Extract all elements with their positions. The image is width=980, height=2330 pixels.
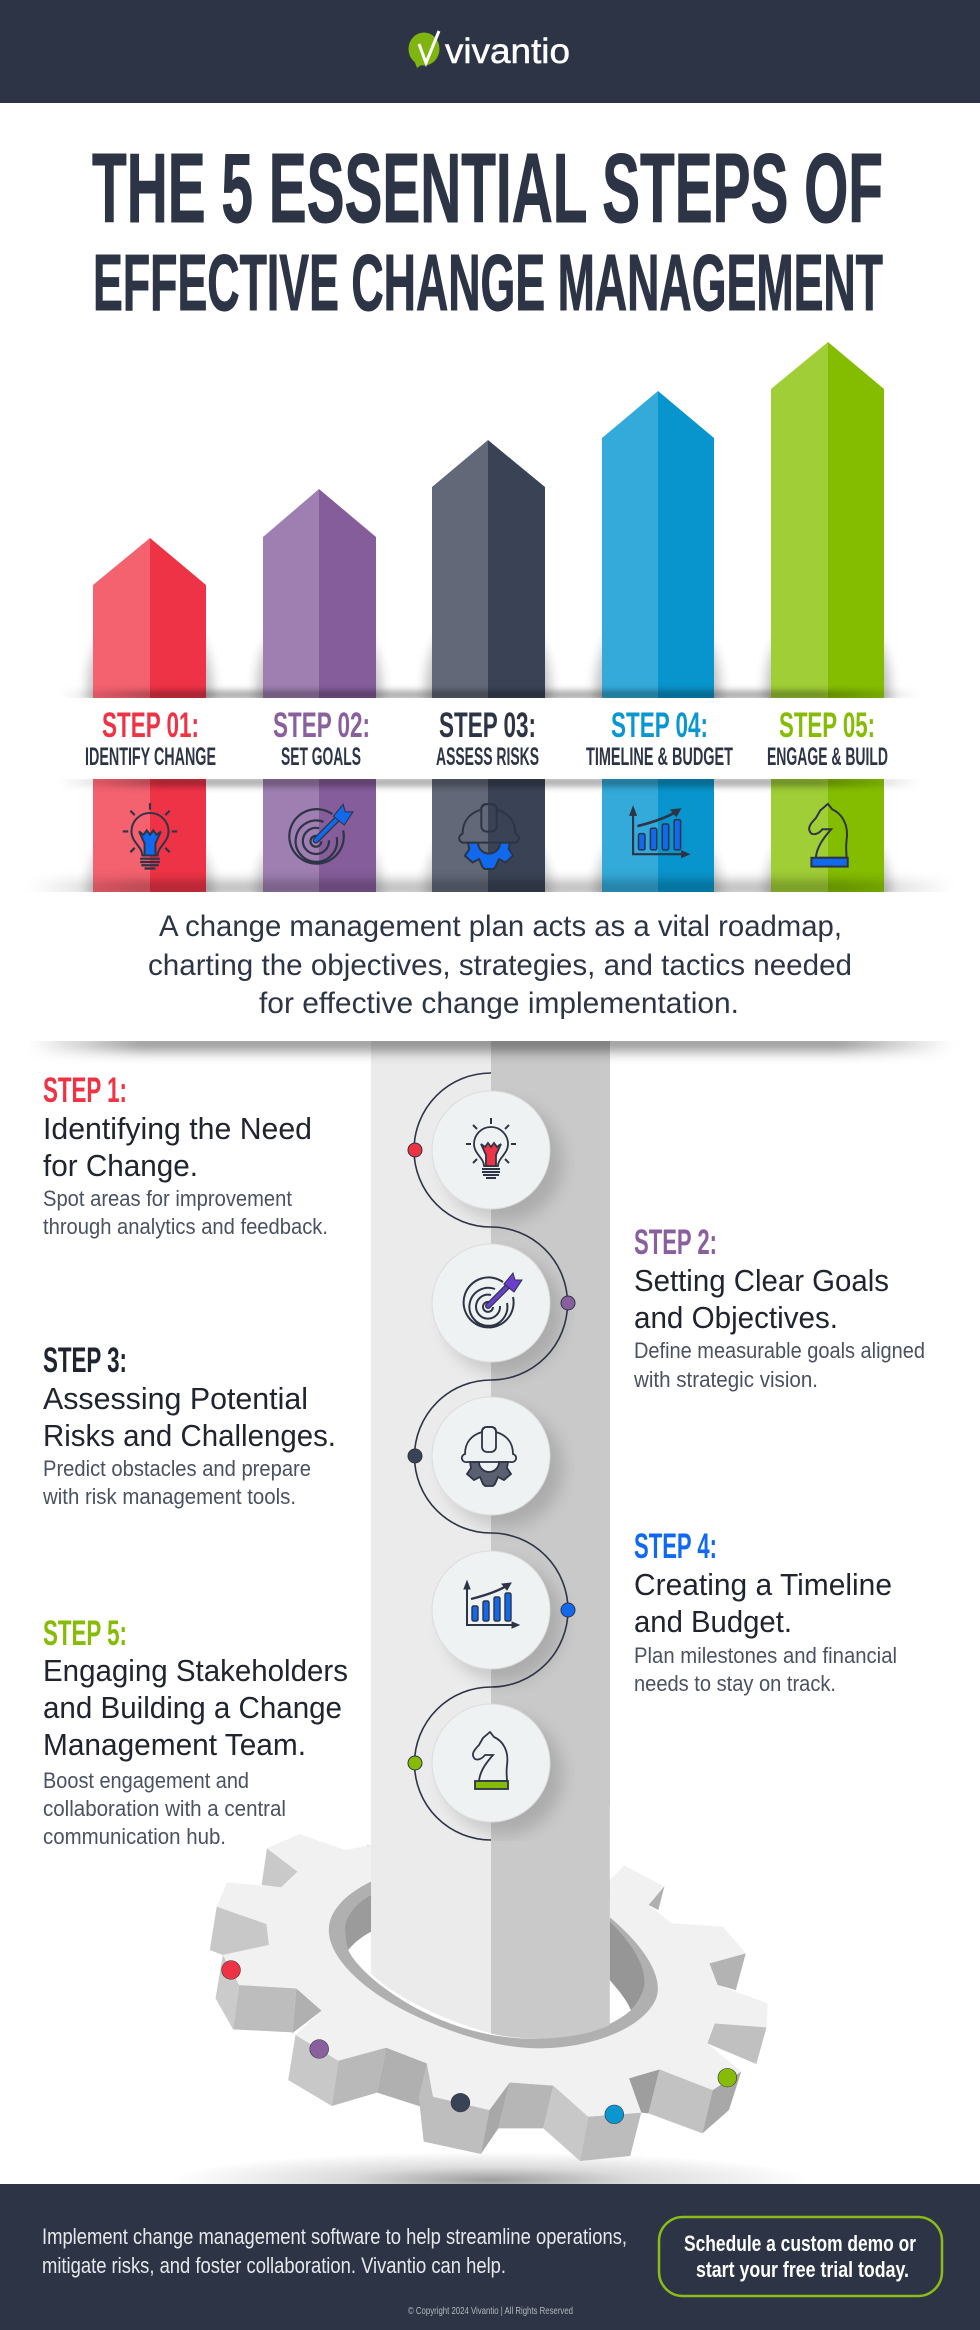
central pillar (371, 1041, 610, 1806)
call-to-action button (659, 2217, 942, 2296)
text: step 5: Engaging Stakeholders (43, 1653, 348, 1688)
title (92, 133, 883, 327)
text: step 4: STEP 4: (634, 1527, 717, 1566)
footer message (42, 2224, 627, 2278)
text: step 2: Setting Clear Goals (634, 1263, 889, 1298)
icon: helmet and gear (462, 1427, 516, 1486)
text: step 4: and Budget. (634, 1604, 792, 1639)
arrow column: step 3 (432, 440, 545, 698)
footer bar (0, 2184, 980, 2330)
footer message: mitigate risks, and foster collaboration. Vivantio can help. (42, 2253, 506, 2278)
label: step 01: STEP 01: (102, 706, 199, 745)
gear dots (222, 1961, 737, 2124)
lower column shadows (88, 820, 890, 960)
step labels row (85, 706, 888, 771)
text: step 3: Predict obstacles and prepare (43, 1456, 311, 1481)
text: step 3: with risk management tools. (42, 1484, 296, 1509)
timeline curve (414, 1073, 568, 1840)
text: step 5: Boost engagement and (43, 1768, 249, 1793)
icon: light bulb, column 1 (123, 803, 177, 869)
label: step 02 (273, 706, 370, 771)
label: step 04: TIMELINE & BUDGET (586, 743, 733, 771)
text: step 5: STEP 5: (43, 1614, 127, 1653)
label: step 04: STEP 04: (611, 706, 708, 745)
text: step 4: needs to stay on track. (634, 1671, 836, 1696)
icon: chess knight, column 5 (809, 804, 848, 867)
icon: chess knight (473, 1732, 508, 1789)
text: step 1: Spot areas for improvement (43, 1186, 292, 1211)
intro text: charting the objectives, strategies, and tactics needed (148, 949, 852, 982)
text: step 5 (43, 1614, 348, 1849)
step circle 3 (432, 1397, 550, 1515)
intro text (148, 910, 852, 1020)
intro text: for effective change implementation. (259, 987, 739, 1020)
text: step 1: STEP 1: (43, 1071, 127, 1110)
label: step 05: STEP 05: (779, 706, 875, 745)
soft shadows beside arrows (88, 605, 890, 775)
icon: helmet and gear, column 3 (459, 804, 519, 869)
pillar base inside gear (371, 1800, 610, 2039)
text: step 3 (42, 1341, 336, 1509)
text: step 2: with strategic vision. (633, 1367, 818, 1392)
intro band (0, 892, 980, 1041)
text: step 5: collaboration with a central (43, 1796, 286, 1821)
label: step 04 (586, 706, 733, 771)
label: step 05: ENGAGE & BUILD (767, 743, 888, 771)
icon: target (464, 1273, 522, 1327)
lower column: step 1 (93, 779, 206, 892)
icon: light bulb (466, 1118, 516, 1178)
text: step 2 (633, 1223, 925, 1392)
text: step 1 (43, 1071, 328, 1239)
step circle 4 (432, 1551, 550, 1669)
step circle 5 (432, 1704, 550, 1822)
text: step 4: Creating a Timeline (634, 1567, 892, 1602)
text: step 5: Management Team. (43, 1727, 306, 1762)
label: step 03: ASSESS RISKS (436, 743, 539, 771)
call-to-action button: Schedule a custom demo or (684, 2231, 916, 2256)
intro band shadow (30, 1036, 950, 1050)
lower column: step 5 (771, 779, 884, 892)
arrow column: step 1 (93, 538, 206, 698)
gear hole opening (348, 1900, 631, 2039)
text: step 1: for Change. (43, 1148, 198, 1183)
gear hole inner wall, left (345, 1895, 371, 1950)
logo: Vivantio: vivantio (445, 32, 570, 71)
band shadows (30, 692, 950, 892)
label: step 02: STEP 02: (273, 706, 370, 745)
text: step 3: Risks and Challenges. (43, 1418, 336, 1453)
intro text: A change management plan acts as a vital roadmap, (159, 910, 842, 943)
step label band (0, 698, 980, 779)
label: step 05 (767, 706, 888, 771)
arrow column: step 4 (602, 391, 714, 698)
text: step 2: STEP 2: (634, 1223, 717, 1262)
text: step 4: Plan milestones and financial (634, 1643, 897, 1668)
label: step 01 (85, 706, 216, 771)
gear side faces (210, 1845, 767, 2161)
step circle 2 (432, 1244, 550, 1362)
text: step 5: communication hub. (43, 1824, 226, 1849)
text: step 3: STEP 3: (43, 1341, 127, 1380)
label: step 01: IDENTIFY CHANGE (85, 743, 216, 771)
label: step 03: STEP 03: (439, 706, 536, 745)
text: step 1: Identifying the Need (43, 1111, 312, 1146)
text: step 1: through analytics and feedback. (43, 1214, 328, 1239)
text: step 2: Define measurable goals aligned (634, 1338, 925, 1363)
gear top face (217, 1834, 768, 2117)
circle shadows on pillar (443, 1102, 563, 1835)
arrow column: step 5 (771, 342, 884, 698)
text: step 3: Assessing Potential (43, 1381, 308, 1416)
ground shadow (170, 2152, 810, 2208)
call-to-action button: start your free trial today. (696, 2257, 909, 2282)
label: step 02: SET GOALS (281, 743, 361, 771)
lower column: step 2 (263, 779, 376, 892)
lower column: step 4 (602, 779, 714, 892)
lower column: step 3 (432, 779, 545, 892)
gear hole inner wall, right (610, 1922, 645, 2010)
text: step 5: and Building a Change (43, 1690, 342, 1725)
icon: target, column 2 (289, 804, 353, 864)
copyright: © Copyright 2024 Vivantio | All Rights Reserved (408, 2306, 573, 2317)
3D gear base (210, 1800, 768, 2161)
footer message: Implement change management software to help streamline operations, (42, 2224, 627, 2249)
gear hole rim (329, 1882, 658, 2048)
icon: growth chart (464, 1581, 519, 1628)
text: step 4 (634, 1527, 897, 1696)
text: step 2: and Objectives. (634, 1300, 838, 1335)
arrow column: step 2 (263, 489, 376, 698)
icon: growth chart, column 4 (630, 807, 689, 857)
header bar (0, 0, 980, 103)
timeline dots (408, 1143, 575, 1770)
label: step 03 (436, 706, 539, 771)
step circle 1 (432, 1091, 550, 1209)
